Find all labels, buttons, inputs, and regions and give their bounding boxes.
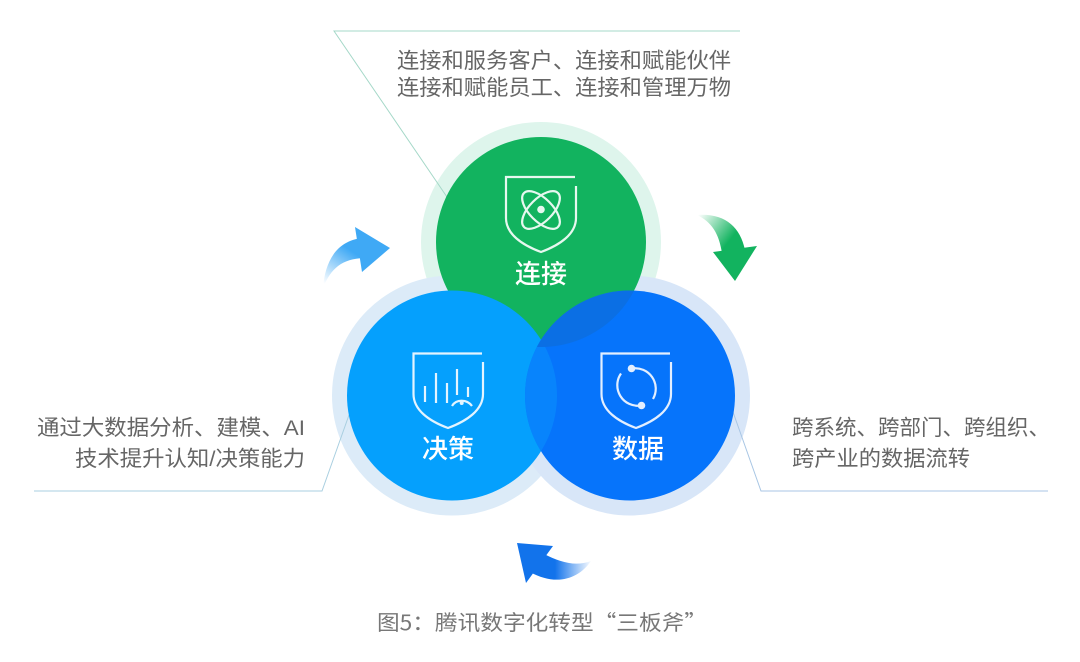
leader line: right callout xyxy=(733,412,1048,491)
arrow: connection to data xyxy=(697,215,757,281)
circle: 决策 halo xyxy=(332,276,572,516)
caption: 图5：腾讯数字化转型“三板斧” xyxy=(377,607,707,637)
icon: shield with atom xyxy=(506,177,576,252)
text block: connection description: 连接和服务客户、连接和赋能伙伴 xyxy=(397,49,731,73)
text block: decision description xyxy=(37,416,305,471)
text block: data description xyxy=(792,416,1050,471)
icon: shield with cycle xyxy=(602,354,671,428)
arrow: data to decision xyxy=(517,543,591,583)
arrow: decision to connection xyxy=(323,227,390,288)
overlap: 连接 and 数据 xyxy=(537,290,634,347)
label: 决策: 决策 xyxy=(422,434,474,464)
circle: 数据 halo xyxy=(510,276,750,516)
icon: shield with bar chart xyxy=(414,354,483,428)
text block: data description: 跨产业的数据流转 xyxy=(792,447,970,471)
circle: 连接 green xyxy=(436,137,646,347)
label: 连接: 连接 xyxy=(515,259,567,289)
circle: 数据 blue xyxy=(525,290,735,500)
circle: 连接 halo xyxy=(421,122,661,362)
circle: 决策 light blue xyxy=(347,290,557,500)
label: 数据: 数据 xyxy=(612,434,664,464)
text block: data description: 跨系统、跨部门、跨组织、 xyxy=(792,416,1050,440)
text block: connection description xyxy=(397,49,731,100)
leader line: left callout xyxy=(34,415,349,491)
text block: connection description: 连接和赋能员工、连接和管理万物 xyxy=(397,76,731,100)
leader line: top callout xyxy=(334,31,740,197)
text block: decision description: 通过大数据分析、建模、AI xyxy=(37,416,305,440)
text block: decision description: 技术提升认知/决策能力 xyxy=(75,447,305,471)
overlap: 决策 and 数据 xyxy=(525,347,557,450)
